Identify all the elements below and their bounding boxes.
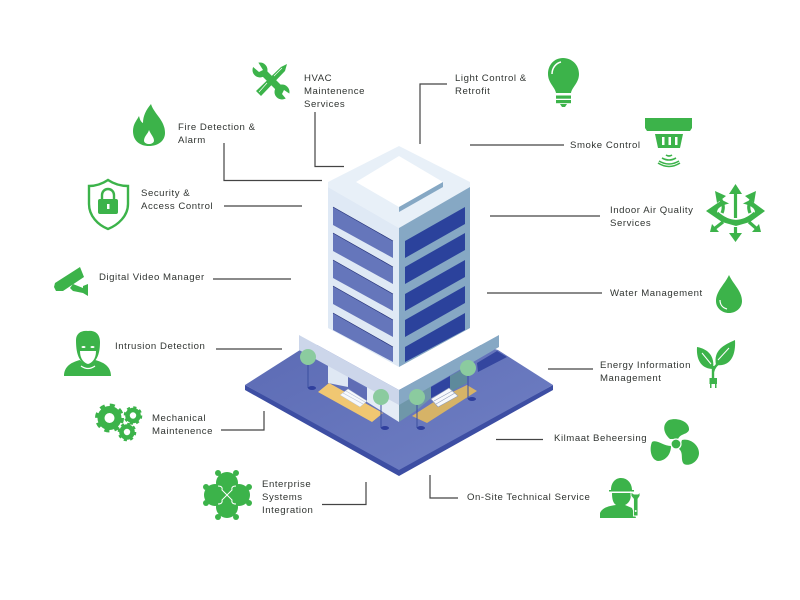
label: on-site: On-Site Technical Service (467, 492, 590, 503)
label: light: Light Control & (455, 73, 527, 84)
icon: plant with plug (697, 340, 735, 388)
icon: water drop (716, 275, 742, 313)
label: mechanical: Mechanical (152, 413, 206, 424)
podium (299, 279, 499, 405)
icon: technician (600, 478, 640, 518)
label: fire detection: Fire Detection & (178, 122, 256, 133)
label: intrusion: Intrusion Detection (115, 341, 205, 352)
icon: smoke detector (645, 118, 692, 166)
trees (300, 349, 476, 430)
label: digital video: Digital Video Manager (99, 272, 205, 283)
tower (328, 146, 470, 367)
leader lines (213, 84, 602, 504)
yellow mats (318, 383, 477, 423)
label: smoke: Smoke Control (570, 140, 641, 151)
label: kilmaat: Kilmaat Beheersing (554, 433, 647, 444)
icon: flame (133, 104, 165, 146)
label: mechanical: Maintenence (152, 426, 213, 437)
label: indoor air: Indoor Air Quality (610, 205, 694, 216)
label: light: Retrofit (455, 86, 490, 97)
label: enterprise: Enterprise (262, 479, 311, 490)
windows left face (333, 207, 393, 362)
icon: air quality arrows (706, 184, 765, 242)
label: energy: Management (600, 373, 662, 384)
benches (340, 388, 458, 407)
icon: shield with padlock (89, 180, 128, 229)
icon: intruder (64, 331, 111, 376)
icon: light bulb (548, 58, 579, 107)
label: HVAC: HVAC (304, 73, 332, 84)
icon: fan (651, 419, 699, 465)
icon: puzzle pieces (203, 470, 252, 520)
label: enterprise: Systems (262, 492, 303, 503)
label: HVAC: Services (304, 99, 345, 110)
label: energy: Energy Information (600, 360, 691, 371)
ground floor (328, 362, 467, 422)
label: HVAC: Maintenence (304, 86, 365, 97)
icon: security camera (54, 267, 88, 296)
label: security: Access Control (141, 201, 213, 212)
icon: wrench and screwdriver (252, 62, 290, 100)
windows right face (405, 207, 465, 362)
icon: gears (97, 406, 141, 440)
label: indoor air: Services (610, 218, 651, 229)
label: security: Security & (141, 188, 190, 199)
isometric building (245, 146, 553, 476)
label: enterprise: Integration (262, 505, 313, 516)
base plate (245, 320, 553, 476)
label: fire detection: Alarm (178, 135, 206, 146)
label: water: Water Management (610, 288, 703, 299)
